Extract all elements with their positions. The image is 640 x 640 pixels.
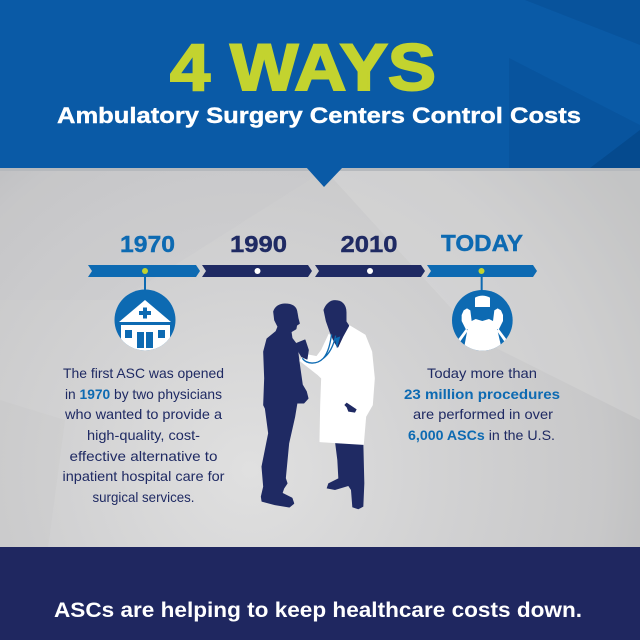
coat pocket hand (344, 403, 357, 413)
grey background panel (0, 168, 640, 548)
tie (335, 336, 340, 348)
text block: ASCs today: Today more than (427, 365, 537, 381)
text block: history of ASCs (62, 365, 225, 505)
icon: surgeon with raised hands (452, 275, 513, 352)
text block: history of ASCs: inpatient hospital care for (62, 468, 225, 484)
doctor hand (297, 340, 308, 359)
text block: ASCs today: 6,000 ASCs in the U.S. (408, 427, 555, 443)
text block: history of ASCs: who wanted to provide a (64, 406, 222, 422)
marker today (478, 268, 484, 274)
icon: hospital building (114, 275, 176, 353)
surgeon cap (475, 296, 490, 307)
title: 4 WAYS (170, 30, 436, 104)
text block: ASCs today: are performed in over (413, 406, 553, 422)
header banner (0, 0, 640, 187)
right sleeve line (497, 329, 506, 342)
arrow segment 1990 (202, 265, 312, 277)
right raised hand (493, 308, 503, 329)
timeline (88, 230, 537, 277)
left raised hand (462, 308, 472, 329)
text block: ASCs today (404, 365, 560, 443)
arrow segment 1970 (88, 265, 200, 277)
footer band (0, 547, 640, 640)
year label: 2010: 2010 (340, 231, 398, 257)
arrow segment today (427, 265, 537, 277)
year label: 1990: 1990 (230, 231, 287, 257)
footer statement: ASCs are helping to keep healthcare costs down. (54, 599, 582, 622)
surgeon torso (463, 319, 502, 352)
marker 1970 (142, 268, 148, 274)
doctor trousers (327, 442, 364, 509)
pointer triangle (306, 167, 343, 187)
year label: today: TODAY (441, 230, 523, 256)
marker 2010 (367, 268, 373, 274)
text block: ASCs today: 23 million procedures (404, 386, 560, 402)
illustration: doctor examining patient (262, 301, 374, 509)
left sleeve line (458, 329, 468, 342)
text block: history of ASCs: surgical services. (92, 489, 194, 505)
text block: history of ASCs: effective alternative to (70, 448, 218, 464)
patient silhouette (262, 304, 308, 507)
arrow segment 2010 (315, 265, 425, 277)
text block: history of ASCs: high-quality, cost- (87, 427, 200, 443)
doctor head (324, 301, 348, 347)
text block: history of ASCs: in 1970 by two physicians (65, 386, 222, 402)
marker 1990 (254, 268, 260, 274)
surgical mask (477, 309, 488, 318)
subtitle: Ambulatory Surgery Centers Control Costs (57, 103, 581, 128)
year label: 1970: 1970 (120, 231, 175, 257)
stethoscope (302, 334, 336, 363)
text block: history of ASCs: The first ASC was opened (63, 365, 224, 381)
doctor white coat (300, 325, 374, 444)
